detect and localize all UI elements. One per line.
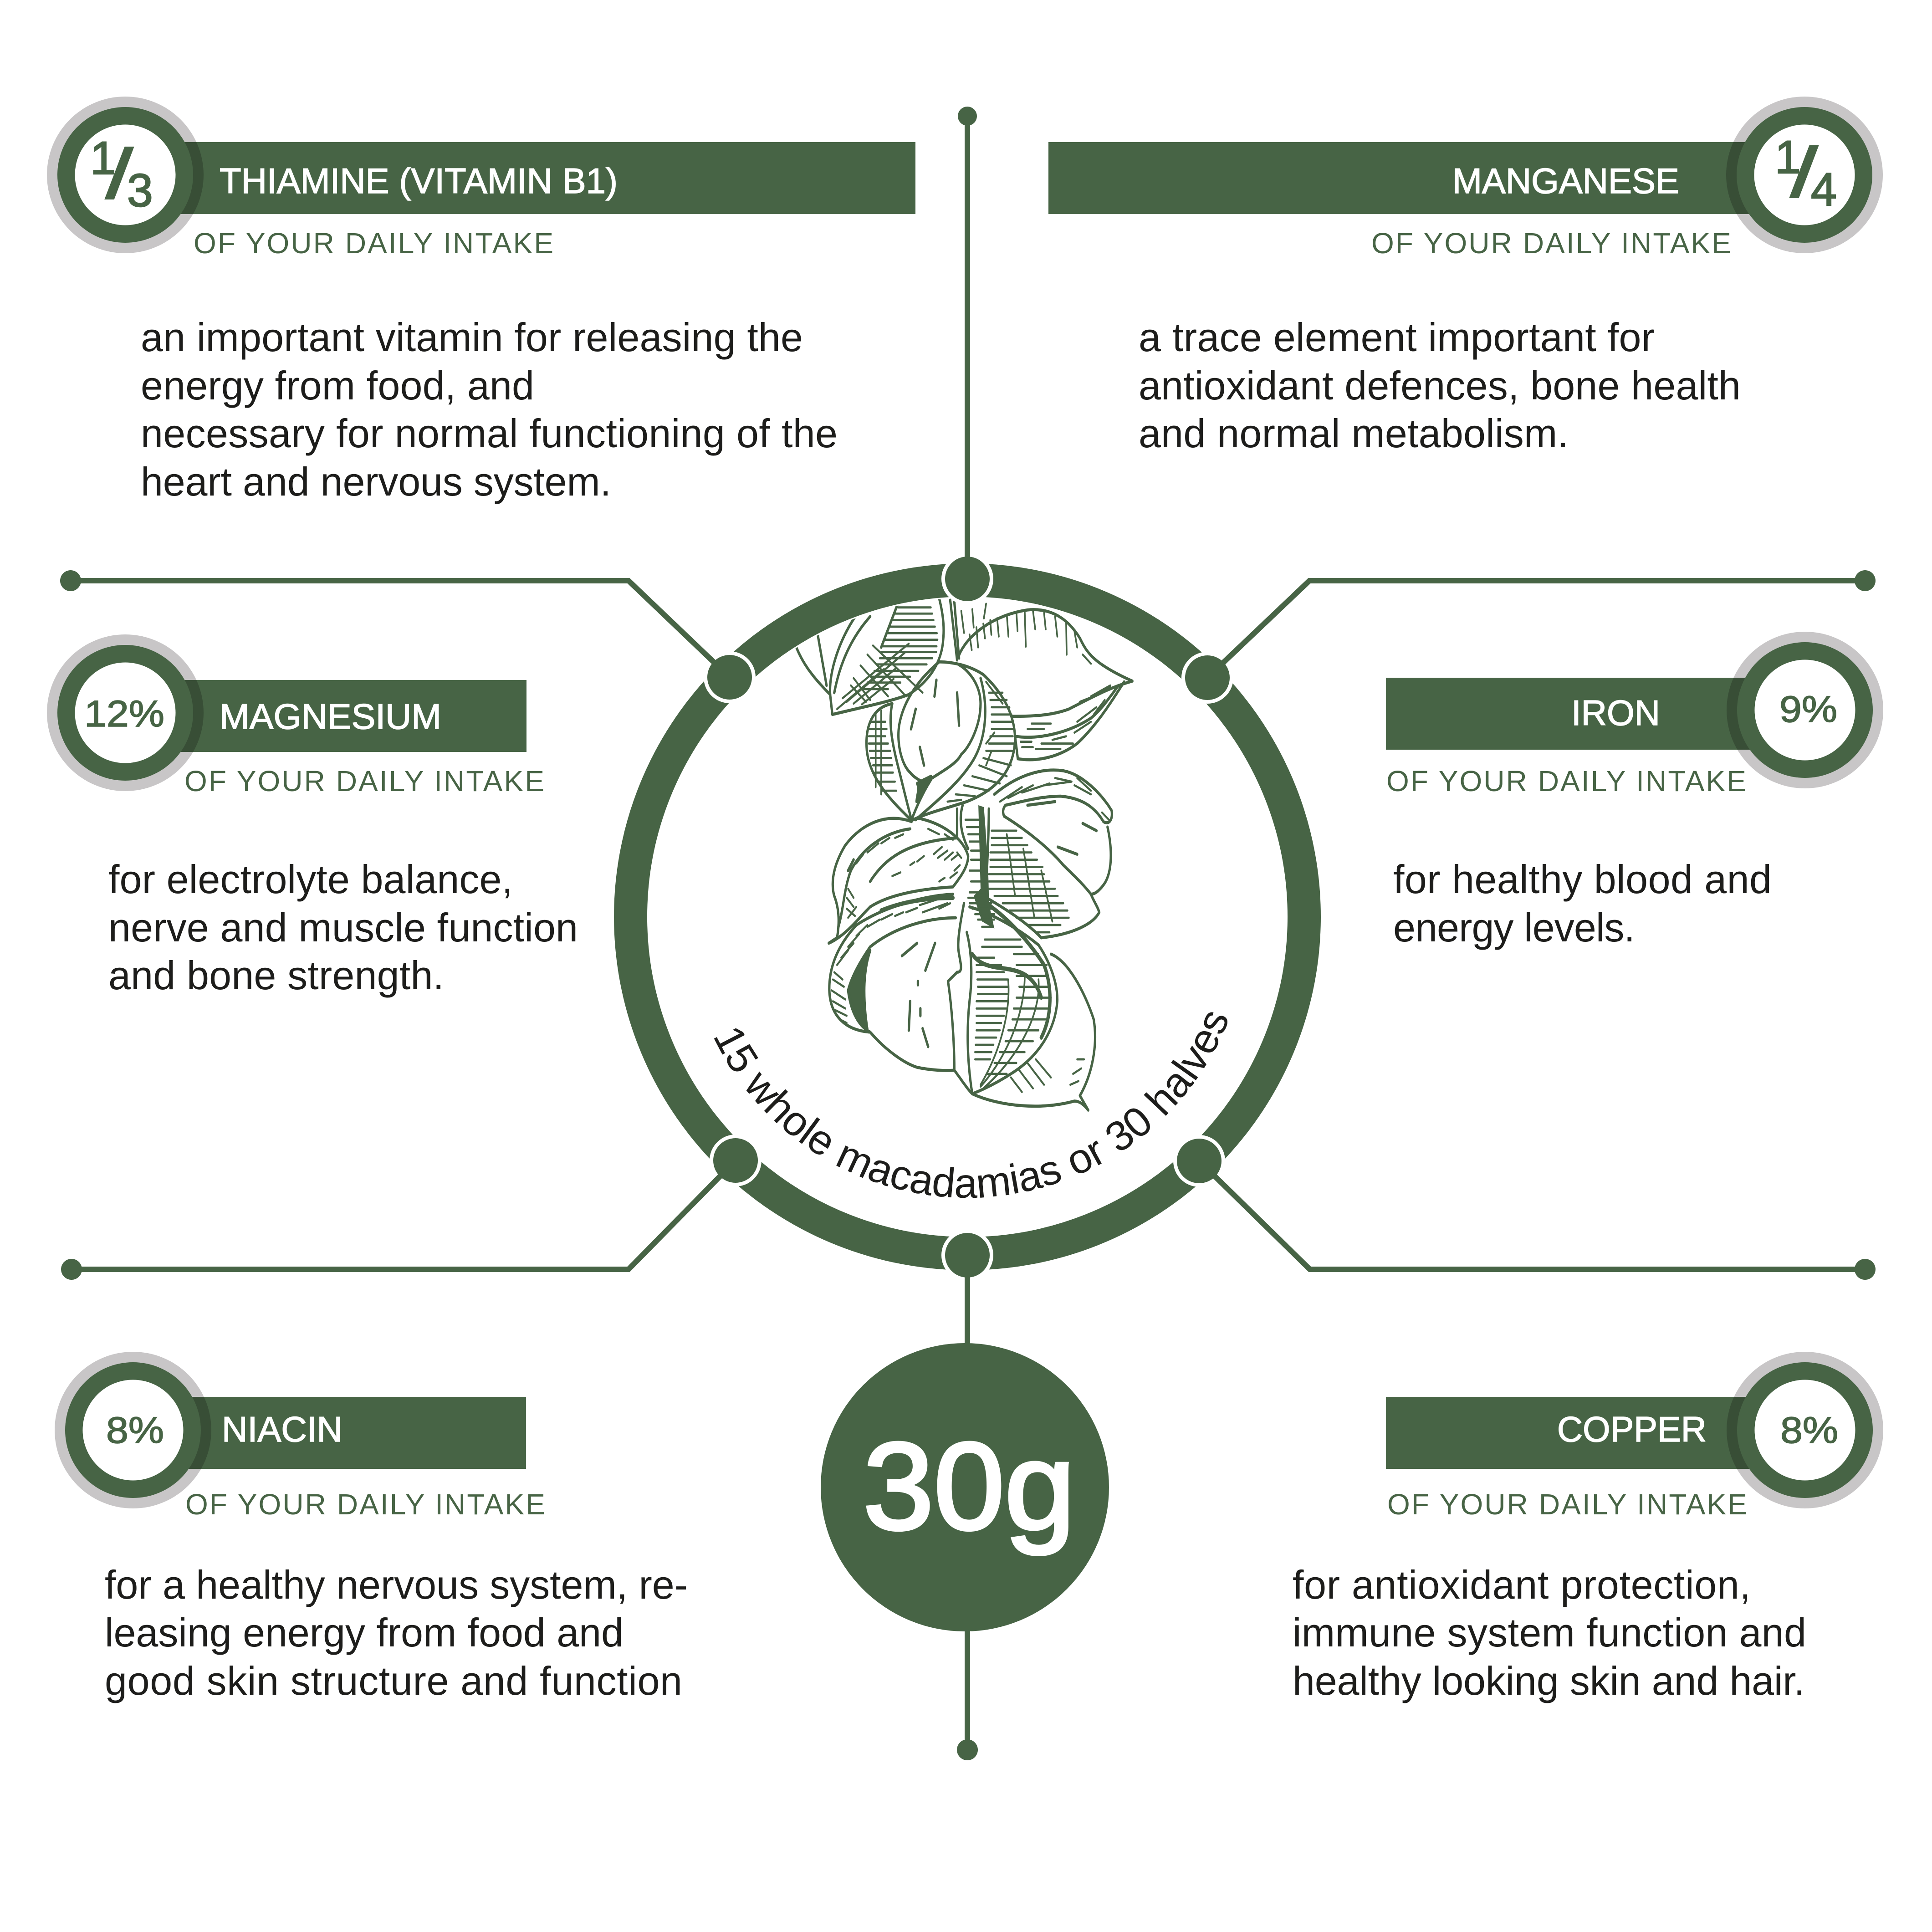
top left husk [796,598,944,715]
label bar [133,1397,526,1469]
description [105,1562,688,1703]
description [1293,1562,1806,1703]
top right husk [958,604,1132,760]
label bar [125,142,915,214]
panel: iron [1386,632,1883,950]
badge: one third: 1 [90,132,116,184]
panel: magnesium [47,634,578,998]
panel: manganese [1048,97,1883,456]
description [141,315,838,504]
panel: thiamine [47,97,915,504]
description: necessary for normal functioning of the [141,411,838,456]
description: for antioxidant protection, [1293,1562,1751,1607]
label bar: MANGANESE [1452,161,1679,201]
description: for healthy blood and [1393,857,1772,902]
description [108,857,578,998]
label bar: IRON [1571,693,1660,733]
badge: 8% [55,1352,211,1508]
label bar: THIAMINE (VITAMIN B1) [220,161,618,201]
badge: one quarter [1726,97,1883,253]
badge: one quarter: 1 [1775,131,1801,183]
ring nodes [707,557,1230,1278]
connector: upper left [60,570,730,677]
badge: 8%: 8% [106,1410,164,1451]
connector: bottom vertical line [957,1255,978,1760]
connector: lower right [1199,1161,1876,1280]
badge: 12% [47,634,204,791]
description: and normal metabolism. [1139,411,1569,456]
badge: 9% [1727,632,1883,788]
right nut [986,770,1112,938]
daily intake caption: OF YOUR DAILY INTAKE [184,765,544,797]
description: for electrolyte balance, [108,857,513,902]
connector: top vertical line [958,107,977,579]
description: for a healthy nervous system, re- [105,1562,688,1607]
label bar [1386,678,1805,750]
description: antioxidant defences, bone health [1139,363,1741,408]
curved caption: 15 whole macadamias or 30 halves [705,1002,1238,1207]
description [1139,315,1741,456]
middle nut [867,662,1015,821]
stem [950,600,994,929]
label bar: COPPER [1557,1409,1707,1449]
illustration: macadamia nuts on a branch [796,598,1132,1110]
badge: one third: / [106,134,133,213]
badge: one quarter: / [1790,133,1818,212]
central ring [630,553,1304,1281]
label bar [1048,142,1804,214]
panel: copper [1293,1352,1883,1703]
description: good skin structure and function [105,1658,682,1703]
description: and bone strength. [108,953,444,998]
description: energy levels. [1393,905,1635,950]
badge: one third [47,97,204,253]
daily intake caption: OF YOUR DAILY INTAKE [1387,1488,1747,1521]
daily intake caption: OF YOUR DAILY INTAKE [1371,227,1731,260]
badge: 8%: 8% [1780,1410,1838,1451]
description: energy from food, and [141,363,534,408]
badge: one quarter: 4 [1811,164,1837,215]
description: nerve and muscle function [108,905,578,950]
description: healthy looking skin and hair. [1293,1658,1805,1703]
panel: niacin [55,1352,688,1703]
badge: 8% [1727,1352,1883,1508]
description: a trace element important for [1139,315,1655,360]
panel: 30g serving circle: 30g [863,1417,1075,1556]
description [1393,857,1772,950]
badge: 12%: 12% [84,693,164,735]
description: heart and nervous system. [141,459,611,504]
label bar: MAGNESIUM [220,696,441,736]
label bar [125,680,526,752]
badge: one third: 3 [127,164,153,216]
bottom nut [829,894,1095,1110]
mid left nut [829,818,968,943]
badge: 9%: 9% [1779,689,1837,730]
label bar [1386,1397,1805,1469]
daily intake caption: OF YOUR DAILY INTAKE [185,1488,545,1521]
daily intake caption: OF YOUR DAILY INTAKE [1386,765,1746,797]
description: leasing energy from food and [105,1610,624,1655]
connector: upper right [1207,570,1876,678]
label bar: NIACIN [222,1409,342,1449]
description: immune system function and [1293,1610,1806,1655]
daily intake caption: OF YOUR DAILY INTAKE [194,227,553,260]
panel: 30g serving circle [821,1343,1109,1631]
description: an important vitamin for releasing the [141,315,803,360]
connector: lower left [61,1160,736,1280]
